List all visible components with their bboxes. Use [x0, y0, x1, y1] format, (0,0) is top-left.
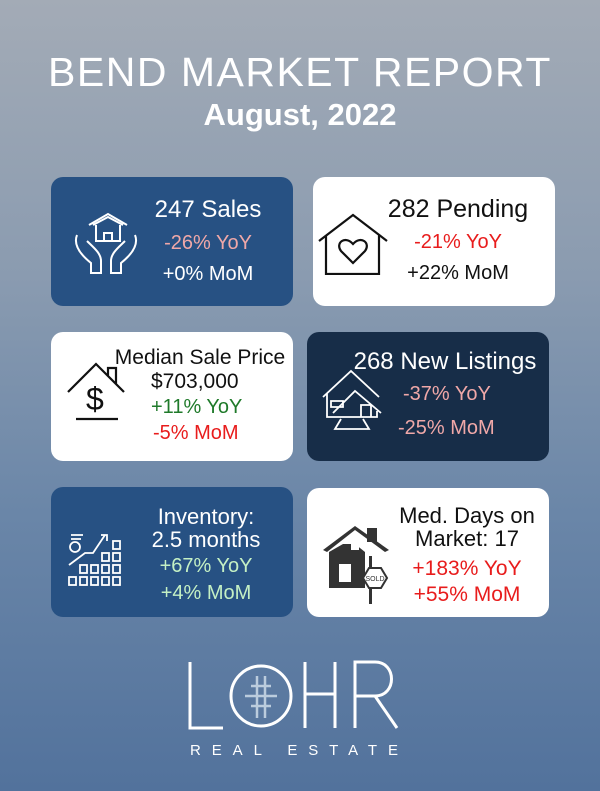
panel: new listings [307, 332, 549, 461]
panel: inventory: 2.5 months [152, 527, 260, 552]
icon: inventory chart [68, 534, 121, 586]
text: days: Med. Days on [399, 503, 535, 528]
panel: median sale price: +11% YoY [151, 396, 242, 418]
icon: dollar house [67, 362, 125, 420]
panel: days on market: +55% MoM [414, 583, 520, 606]
icon: heart house [318, 214, 388, 275]
text: price: Median Sale Price [115, 346, 285, 369]
panel: days on market: Market: 17 [415, 526, 519, 551]
panel: median sale price: -5% MoM [153, 422, 239, 444]
logo [188, 660, 398, 758]
title: BEND MARKET REPORT [48, 49, 552, 95]
panel: inventory: +4% MoM [161, 582, 251, 604]
panel: sales [51, 177, 293, 306]
panel: inventory [51, 487, 293, 617]
panel: median sale price: $703,000 [151, 370, 239, 393]
panel: pending: -21% YoY [414, 231, 502, 253]
panel: new listings: -37% YoY [403, 383, 491, 405]
icon: houses [322, 370, 382, 430]
icon: sold house: SOLD [365, 576, 385, 583]
panel: sales: -26% YoY [164, 232, 252, 254]
icon: hands house [74, 212, 138, 274]
panel: pending: +22% MoM [407, 262, 509, 284]
text: pending: 282 Pending [388, 195, 528, 223]
text: listings: 268 New Listings [354, 348, 536, 375]
icon: sold house [323, 526, 389, 604]
panel: median sale price [51, 332, 293, 461]
text: sales: 247 Sales [155, 196, 261, 223]
icon: dollar house: $ [86, 381, 104, 417]
panel: sales: +0% MoM [163, 263, 253, 285]
text: inventory: Inventory: [158, 504, 254, 529]
panel: days on market [307, 488, 549, 617]
panel: new listings: -25% MoM [398, 417, 495, 439]
panel: inventory: +67% YoY [160, 555, 252, 577]
panel: pending [313, 177, 555, 306]
subtitle: August, 2022 [204, 97, 396, 132]
panel: days on market: +183% YoY [412, 557, 522, 580]
